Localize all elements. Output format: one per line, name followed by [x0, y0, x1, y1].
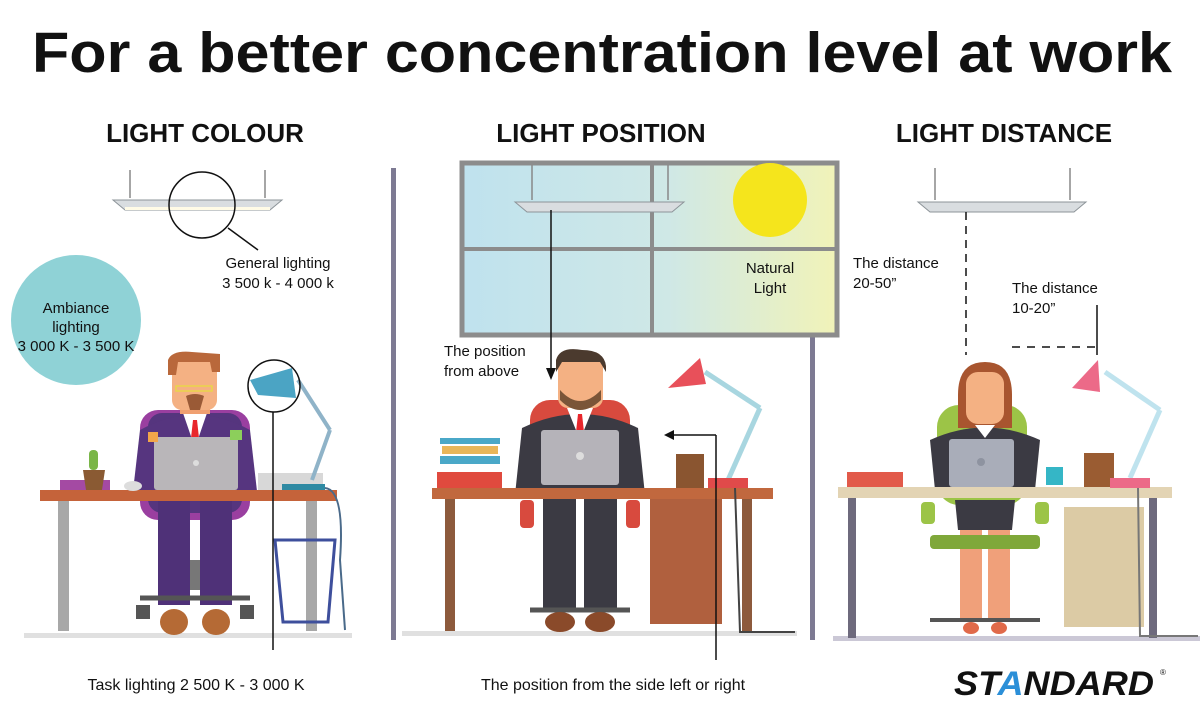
ceiling lamp middle [515, 165, 684, 212]
text: position from side: The position from the side left or right [481, 677, 746, 694]
ceiling lamp left [113, 170, 282, 210]
arrow from side [664, 430, 716, 660]
text: general lighting: General lighting [225, 255, 331, 272]
title: For a better concentration level at work [32, 21, 1172, 85]
text: task lighting: Task lighting 2 500 K - 3 000 K [87, 677, 305, 694]
panel: light colour [11, 170, 352, 694]
desk right [838, 453, 1172, 638]
heading: light distance: LIGHT DISTANCE [896, 118, 1112, 148]
floor [402, 631, 797, 636]
text: natural light: Natural [746, 260, 794, 277]
ambiance lighting circle: Ambiance [43, 300, 109, 317]
wastebasket [275, 540, 335, 622]
text: distance 20-50: 20-50” [853, 275, 896, 292]
text: position from above: The position [444, 343, 526, 360]
dashed distance vertical [965, 212, 967, 355]
desk lamp blue [250, 368, 345, 630]
floor [833, 636, 1200, 641]
ambiance lighting circle: lighting [52, 319, 100, 336]
window [462, 163, 837, 335]
floor [24, 633, 352, 638]
man red chair [515, 349, 645, 632]
callout task lighting [248, 360, 300, 412]
panel: light position [402, 163, 837, 694]
ambiance lighting circle [11, 255, 141, 385]
logo: standard: ® [1160, 668, 1166, 677]
desk lamp red [668, 358, 795, 632]
text: distance 20-50: The distance [853, 255, 939, 272]
text: general lighting: 3 500 k - 4 000 k [222, 275, 334, 292]
heading: light position: LIGHT POSITION [496, 118, 706, 148]
man purple suit [132, 352, 258, 635]
logo: standard: STANDARD [954, 665, 1154, 703]
arrow from above [546, 210, 556, 380]
callout circle general lighting [169, 172, 235, 238]
text: distance 10-20: 10-20” [1012, 300, 1055, 317]
woman green chair [921, 362, 1049, 634]
ambiance lighting circle: 3 000 K - 3 500 K [18, 338, 134, 355]
desk lamp pink [1072, 360, 1198, 636]
heading: light colour: LIGHT COLOUR [106, 118, 304, 148]
text: distance 10-20: The distance [1012, 280, 1098, 297]
text: position from above: from above [444, 363, 519, 380]
text: natural light: Light [754, 280, 787, 297]
panel: light distance [833, 168, 1200, 703]
ceiling lamp right [918, 168, 1086, 212]
desk left [40, 450, 337, 631]
desk middle [432, 438, 773, 631]
dashed distance horizontal [1012, 305, 1097, 355]
